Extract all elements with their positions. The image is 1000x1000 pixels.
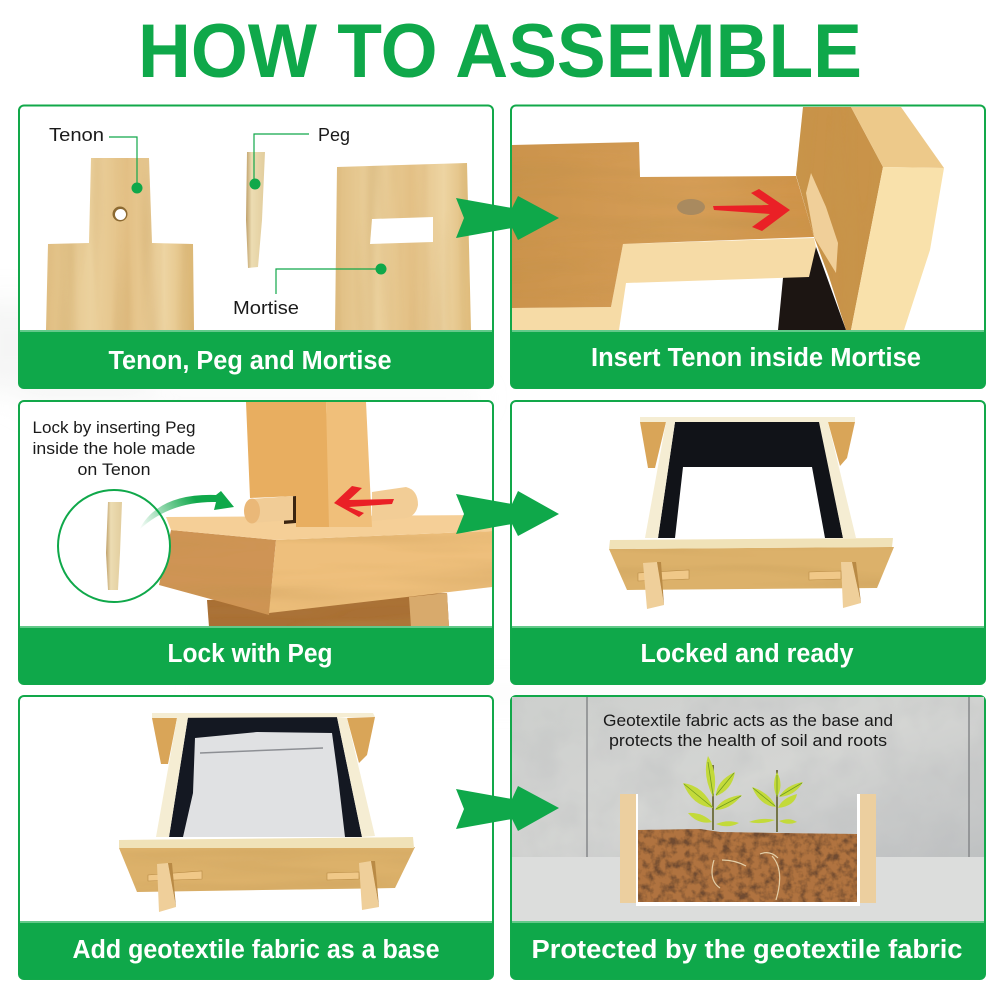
panel: add geotextile (19, 696, 493, 979)
text: geotextile note: protects the health of soil and roots (609, 732, 887, 750)
image: frame with fabric (119, 713, 415, 912)
caption (511, 626, 985, 684)
text: lock note: inside the hole made (32, 440, 196, 458)
panel: lock with peg (19, 401, 493, 684)
panel: tenon, peg and mortise (19, 106, 493, 388)
text: lock note: on Tenon (78, 461, 150, 479)
caption: Lock with Peg (168, 640, 332, 668)
callout: mortise: Mortise (233, 298, 299, 318)
callout: tenon: Tenon (49, 125, 104, 145)
panel: protected by fabric (511, 696, 985, 979)
callout: tenon (49, 125, 142, 194)
caption (19, 921, 493, 979)
text: lock note (32, 419, 196, 479)
caption (19, 330, 493, 388)
title: HOW TO ASSEMBLE (138, 9, 862, 94)
caption: Protected by the geotextile fabric (532, 936, 962, 964)
text: lock note: Lock by inserting Peg (32, 419, 196, 437)
image: tenon into mortise (512, 107, 944, 330)
arrow: red insertion (713, 189, 790, 231)
image: room background (512, 697, 984, 921)
panel: locked and ready (511, 401, 985, 684)
arrow: step 3 to 4 (456, 491, 559, 536)
arrow: step 5 to 6 (456, 786, 559, 831)
panel: insert tenon (511, 106, 985, 388)
caption: Add geotextile fabric as a base (72, 936, 440, 964)
arrow: peg direction (139, 491, 234, 530)
arrow: red lock (334, 486, 394, 517)
image: soil cross-section (620, 794, 876, 906)
image: mortise board (335, 163, 471, 330)
callout: mortise (233, 264, 386, 318)
caption: Insert Tenon inside Mortise (591, 344, 921, 372)
image: tenon board (46, 158, 194, 330)
text: geotextile note: Geotextile fabric acts as the base and (603, 712, 893, 730)
caption (19, 626, 493, 684)
callout: peg: Peg (318, 125, 350, 145)
image: peg locking joint (159, 402, 492, 627)
text: geotextile note (603, 712, 893, 750)
caption: Locked and ready (640, 640, 854, 668)
image: assembled frame (609, 417, 894, 609)
caption (511, 330, 985, 388)
caption: Tenon, Peg and Mortise (108, 347, 392, 375)
callout: peg (250, 125, 350, 190)
icon: peg in circle (58, 490, 170, 602)
image: peg (246, 152, 265, 268)
icon: plants (683, 756, 803, 832)
caption (511, 921, 985, 979)
arrow: step 1 to 2 (456, 196, 559, 240)
